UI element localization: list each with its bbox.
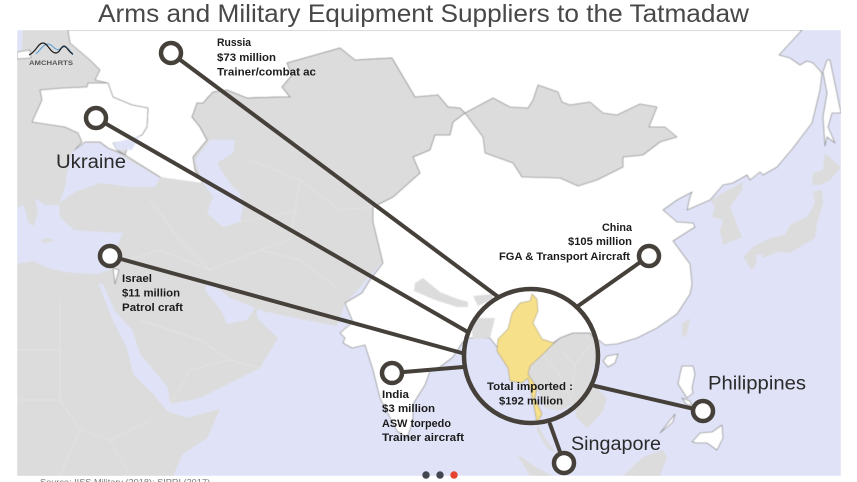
label: total imported <box>487 381 573 408</box>
marker: Ukraine <box>86 108 106 128</box>
Mediterranean Sea <box>17 198 123 274</box>
label: Singapore: Singapore <box>571 434 661 455</box>
Caspian Sea <box>195 140 243 227</box>
slide pagination dots <box>422 471 458 479</box>
amCharts logo: AMCHARTS <box>29 61 73 67</box>
label: China: FGA & Transport Aircraft <box>499 251 630 263</box>
label: India: $3 million <box>382 403 435 415</box>
label: Israel: Israel <box>122 273 152 285</box>
label: total imported: Total imported : <box>487 381 573 393</box>
marker: Russia <box>161 43 181 63</box>
label: Russia: $73 million <box>217 52 276 64</box>
label: Russia: Russia <box>217 37 252 49</box>
Sea of Azov <box>113 136 140 150</box>
label: Israel: Patrol craft <box>122 302 183 314</box>
label: China: $105 million <box>568 236 632 248</box>
label: China: China <box>602 222 633 234</box>
label: total imported: $192 million <box>499 396 563 408</box>
label: India: ASW torpedo <box>382 418 451 430</box>
label: Ukraine: Ukraine <box>56 152 126 173</box>
marker: Philippines <box>693 401 713 421</box>
label: Israel: $11 million <box>122 288 180 300</box>
label: Russia <box>217 37 316 78</box>
connector lines from suppliers to Myanmar <box>96 53 703 463</box>
Myanmar shape <box>497 294 554 423</box>
label: Russia: Trainer/combat ac <box>217 66 316 78</box>
marker: China <box>639 246 659 266</box>
Black Sea <box>59 143 160 203</box>
amCharts logo <box>29 43 73 67</box>
marker: Israel <box>100 246 120 266</box>
label: India: India <box>382 389 410 401</box>
label: India: Trainer aircraft <box>382 432 464 444</box>
label: India <box>382 389 464 444</box>
central circle around Myanmar <box>464 289 598 423</box>
label: Israel <box>122 273 183 314</box>
marker: India <box>382 363 402 383</box>
marker: Singapore <box>554 453 574 473</box>
title: Arms and Military Equipment Suppliers to the Tatmadaw <box>98 0 750 28</box>
label: Philippines: Philippines <box>708 374 806 394</box>
label: China <box>499 222 633 263</box>
